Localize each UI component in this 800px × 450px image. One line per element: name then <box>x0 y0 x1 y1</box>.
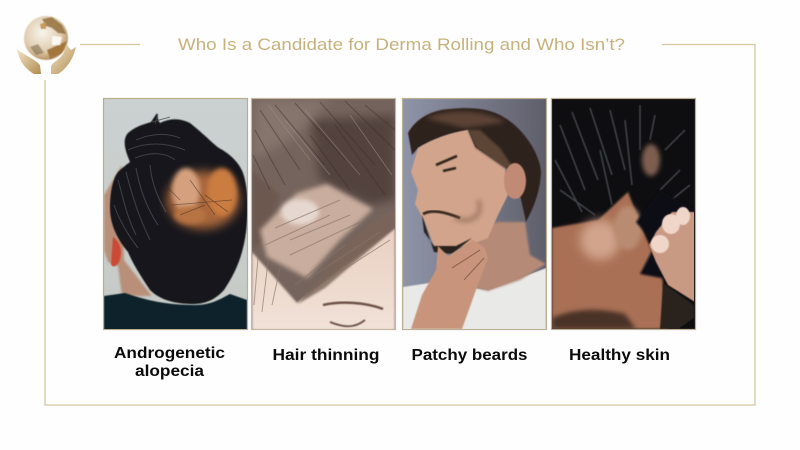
title: Who Is a Candidate for Derma Rolling and Who Isn’t? <box>178 36 625 54</box>
ear <box>504 163 526 199</box>
face <box>411 130 508 250</box>
fringe strands <box>298 208 395 304</box>
moustache and beard <box>423 211 460 218</box>
icon: left hand <box>17 49 41 74</box>
neck <box>465 222 546 291</box>
eyebrow <box>552 310 636 329</box>
hair texture <box>253 101 395 195</box>
label: androgenetic alopecia: Androgenetic <box>114 345 225 362</box>
shirt <box>403 268 546 330</box>
bald spot <box>167 171 239 229</box>
eyebrow <box>323 303 383 309</box>
panel: patchy beards photo <box>402 98 546 330</box>
hair highlights <box>555 105 690 215</box>
eye and brow <box>436 156 457 171</box>
neck and head skin <box>104 165 152 296</box>
label: patchy beards: Patchy beards <box>412 347 528 364</box>
hair mass <box>110 113 248 304</box>
shirt <box>104 293 247 330</box>
crown thinning <box>642 144 660 176</box>
hand and fingers <box>649 212 695 302</box>
panel: androgenetic alopecia photo <box>104 98 248 330</box>
shiny scalp <box>580 220 620 260</box>
decorative frame <box>45 44 755 405</box>
hand <box>411 240 488 329</box>
darker hair <box>310 115 395 205</box>
ear <box>111 237 121 266</box>
side hair <box>634 190 676 280</box>
side fade <box>468 130 512 168</box>
panel: hair thinning photo <box>252 98 396 330</box>
label: hair thinning: Hair thinning <box>272 347 380 364</box>
hair texture <box>114 114 185 248</box>
skin <box>252 228 395 330</box>
forehead skin <box>552 192 668 329</box>
label: androgenetic alopecia: alopecia <box>135 363 204 380</box>
label: healthy skin: Healthy skin <box>569 347 670 364</box>
panel: healthy skin photo <box>552 98 696 330</box>
logo: globe held by hands <box>17 16 76 74</box>
label: androgenetic alopecia <box>114 345 225 380</box>
icon: right hand <box>51 45 76 74</box>
scalp <box>260 184 373 278</box>
hair <box>408 108 541 222</box>
eye <box>330 320 365 326</box>
icon: globe <box>24 16 68 60</box>
